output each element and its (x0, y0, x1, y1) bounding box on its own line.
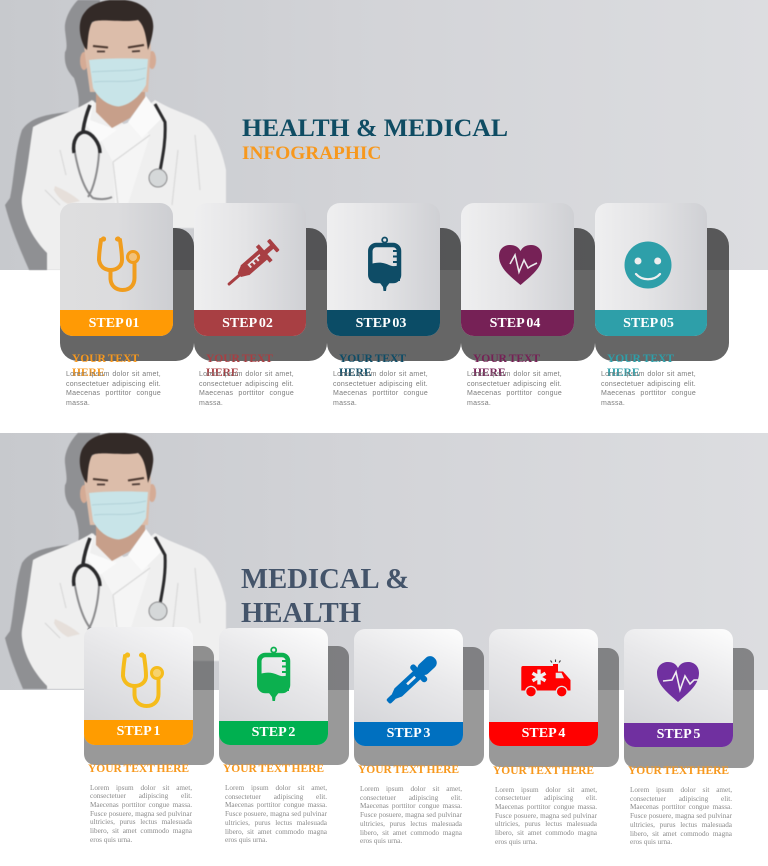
heading: HERE (473, 366, 505, 378)
body text: consectetuer adipiscing elit. (467, 380, 562, 388)
step 4 (489, 629, 619, 846)
heading (72, 352, 139, 378)
icon: IV bag (257, 646, 290, 701)
background band (0, 433, 768, 690)
step 03 (327, 203, 461, 406)
step 03: STEP 03 (356, 316, 406, 331)
icon: stethoscope (121, 652, 164, 708)
step 01: STEP 01 (89, 316, 139, 331)
body text: ultricies, purus lectus malesuada (225, 819, 327, 827)
body text: Fusce posuere, magna sed pulvinar (630, 812, 732, 820)
heading: HERE (339, 366, 371, 378)
body text: Lorem ipsum dolor sit amet, (495, 786, 597, 794)
body text (601, 370, 696, 406)
body text: Lorem ipsum dolor sit amet, (199, 371, 294, 378)
body text (66, 370, 161, 406)
body text: massa. (333, 400, 357, 406)
body text: consectetuer adipiscing elit. (66, 380, 161, 388)
body text: consectetuer adipiscing elit. (360, 794, 462, 802)
body text: consectetuer adipiscing elit. (495, 794, 597, 802)
icon: IV bag (368, 236, 402, 291)
heading: HERE (607, 366, 639, 378)
step 2 (219, 628, 349, 844)
heading (206, 352, 273, 378)
heading: YOUR TEXT (607, 352, 674, 365)
body text: Lorem ipsum dolor sit amet, (66, 371, 161, 378)
step 02 (194, 203, 327, 406)
body text: consectetuer adipiscing elit. (601, 380, 696, 388)
heading: YOUR TEXT HERE (88, 763, 189, 775)
body text: libero, sit amet commodo magna (90, 827, 192, 835)
step 05: STEP 05 (623, 316, 674, 331)
body text: Lorem ipsum dolor sit amet, (601, 371, 696, 378)
body text: Maecenas porttitor congue (199, 390, 294, 397)
step 1 (84, 627, 214, 844)
body text: massa. (467, 400, 491, 406)
body text: eros quis urna. (630, 838, 672, 846)
body text (199, 370, 294, 406)
title (241, 563, 409, 629)
body text: Maecenas porttitor congue (601, 390, 696, 397)
step 2: STEP 2 (252, 724, 295, 740)
step 3 (354, 629, 484, 845)
body text (495, 786, 597, 846)
body text: massa. (601, 400, 625, 406)
body text (90, 784, 192, 844)
heading (339, 352, 406, 378)
body text: Maecenas porttitor congue massa. (495, 803, 597, 811)
body text: consectetuer adipiscing elit. (90, 792, 192, 800)
body text: Maecenas porttitor congue (333, 390, 428, 397)
step 04 (461, 203, 595, 406)
icon: heart with pulse (657, 662, 699, 702)
heading: HERE (72, 366, 104, 378)
body text: eros quis urna. (495, 838, 537, 846)
heading: HERE (206, 366, 238, 378)
step 05 (595, 203, 729, 406)
icon: smiley face (624, 242, 672, 288)
body text: consectetuer adipiscing elit. (225, 793, 327, 801)
background band (0, 0, 768, 270)
heading: YOUR TEXT (473, 352, 540, 365)
body text: Maecenas porttitor congue massa. (90, 801, 192, 809)
body text: Lorem ipsum dolor sit amet, (360, 785, 462, 793)
body text: Lorem ipsum dolor sit amet, (225, 784, 327, 792)
photo: doctor wearing mask (4, 432, 226, 690)
body text (225, 784, 327, 844)
body text: ultricies, purus lectus malesuada (360, 820, 462, 828)
body text: Maecenas porttitor congue massa. (225, 801, 327, 809)
title: HEALTH & MEDICAL (242, 113, 508, 142)
title: MEDICAL & (241, 563, 409, 595)
body text: Maecenas porttitor congue massa. (360, 802, 462, 810)
heading: YOUR TEXT (72, 352, 139, 365)
body text: consectetuer adipiscing elit. (333, 380, 428, 388)
body text: Lorem ipsum dolor sit amet, (333, 371, 428, 378)
title: HEALTH (241, 597, 361, 629)
body text: ultricies, purus lectus malesuada (495, 820, 597, 828)
body text: Fusce posuere, magna sed pulvinar (90, 810, 192, 818)
body text: Fusce posuere, magna sed pulvinar (360, 811, 462, 819)
heading: YOUR TEXT HERE (628, 765, 729, 777)
body text (333, 370, 428, 406)
heading (473, 352, 540, 378)
body text: Maecenas porttitor congue massa. (630, 803, 732, 811)
heading: YOUR TEXT HERE (223, 763, 324, 775)
photo: doctor wearing mask (4, 0, 226, 271)
body text: ultricies, purus lectus malesuada (630, 821, 732, 829)
step 5: STEP 5 (657, 727, 700, 742)
heading: YOUR TEXT (206, 352, 273, 365)
icon: stethoscope (97, 236, 140, 292)
step 1: STEP 1 (117, 724, 160, 739)
panel: health and medical infographic (0, 0, 768, 406)
panel: medical and health (0, 432, 768, 846)
body text (630, 786, 732, 846)
heading: YOUR TEXT (339, 352, 406, 365)
step 5 (624, 629, 754, 846)
body text: ultricies, purus lectus malesuada (90, 818, 192, 826)
heading (607, 352, 674, 378)
body text: libero, sit amet commodo magna (360, 829, 462, 837)
body text: eros quis urna. (360, 837, 402, 845)
body text (360, 785, 462, 845)
step 4: STEP 4 (522, 726, 565, 741)
step 01 (60, 203, 194, 406)
body text: libero, sit amet commodo magna (630, 830, 732, 838)
heading: YOUR TEXT HERE (493, 765, 594, 777)
body text: Maecenas porttitor congue (467, 390, 562, 397)
body text: eros quis urna. (225, 836, 267, 844)
body text: eros quis urna. (90, 836, 132, 844)
icon: ambulance (521, 660, 570, 696)
body text: libero, sit amet commodo magna (225, 828, 327, 836)
step 04: STEP 04 (490, 316, 540, 331)
body text: massa. (199, 400, 223, 406)
body text: Lorem ipsum dolor sit amet, (630, 786, 732, 794)
step 02: STEP 02 (222, 316, 273, 331)
icon: heart with pulse (499, 245, 542, 285)
icon: syringe (228, 239, 280, 286)
body text: Maecenas porttitor congue (66, 390, 161, 397)
body text: Lorem ipsum dolor sit amet, (467, 371, 562, 378)
subtitle: INFOGRAPHIC (242, 143, 381, 164)
body text: Fusce posuere, magna sed pulvinar (225, 810, 327, 818)
body text: consectetuer adipiscing elit. (199, 380, 294, 388)
body text: libero, sit amet commodo magna (495, 829, 597, 837)
body text: massa. (66, 400, 90, 406)
body text: Lorem ipsum dolor sit amet, (90, 784, 192, 792)
icon: dropper (386, 656, 437, 704)
body text (467, 370, 562, 406)
step 3: STEP 3 (387, 726, 430, 741)
body text: Fusce posuere, magna sed pulvinar (495, 812, 597, 820)
body text: consectetuer adipiscing elit. (630, 795, 732, 803)
heading: YOUR TEXT HERE (358, 764, 459, 776)
